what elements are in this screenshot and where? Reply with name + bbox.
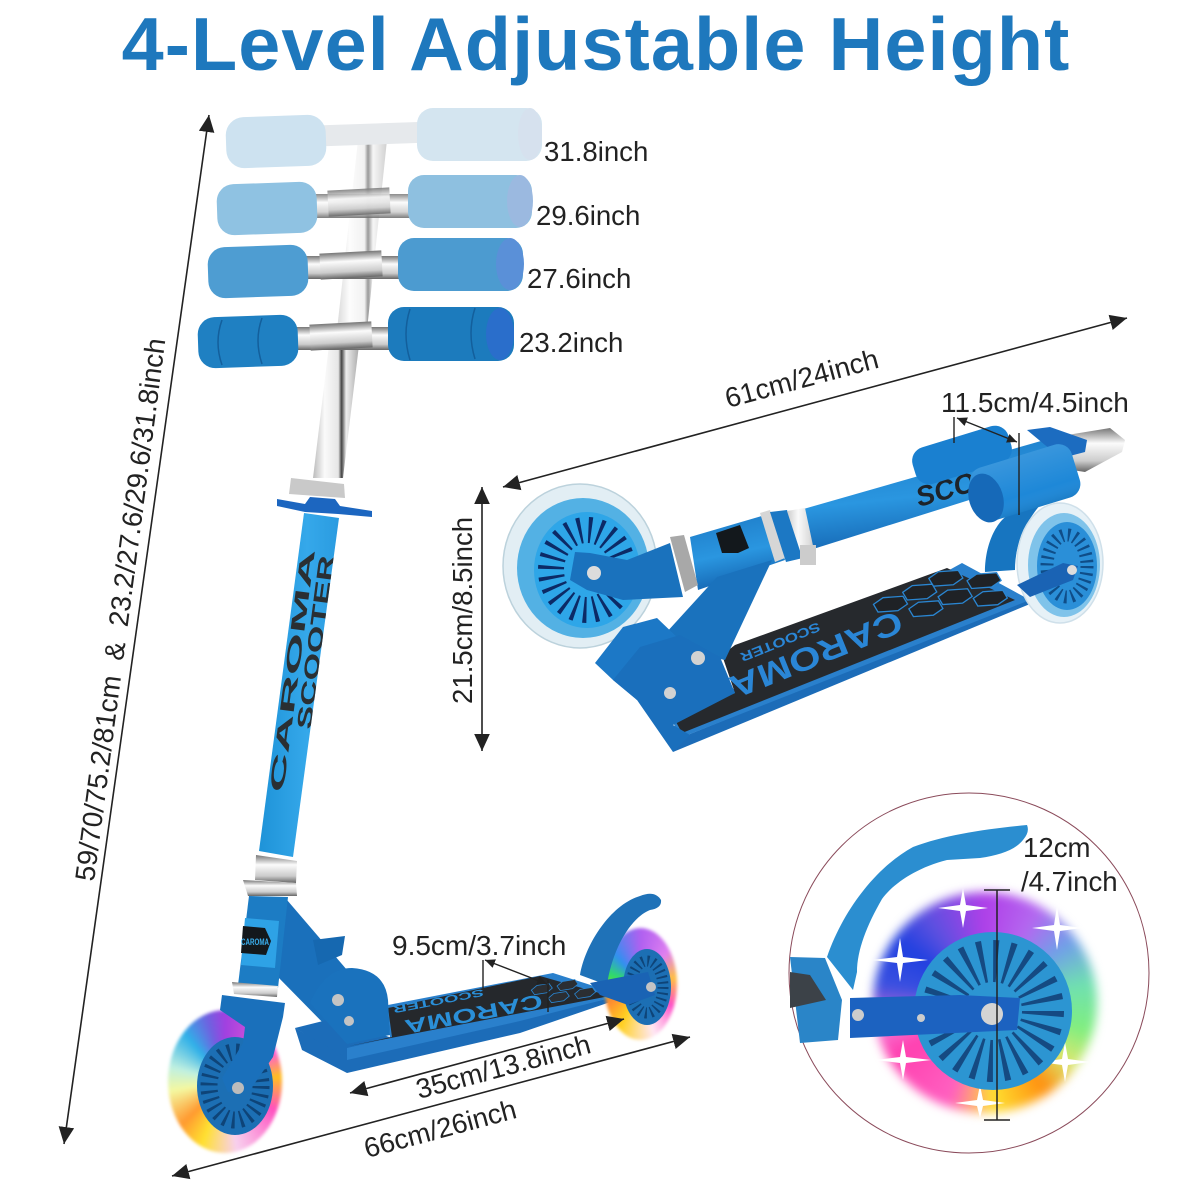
stem brand text: CAROMA [266, 548, 320, 794]
folded deck hex pattern [872, 567, 1008, 619]
folded deck top [673, 563, 1030, 738]
folded deck side [673, 597, 1030, 752]
lower stem band [241, 918, 279, 968]
dimension arrow: total height: 59/70/75.2/81cm & 23.2/27.6/29.6/31.8inch [69, 336, 171, 883]
deck side [295, 995, 622, 1073]
stem brand text: SCOOTER [293, 554, 339, 731]
deck hex pattern [531, 977, 596, 1005]
folded front grip [962, 441, 1084, 527]
dimension: deck width: 9.5cm/3.7inch [392, 930, 566, 961]
wheel diameter line [984, 889, 1010, 891]
wheel diameter label: 12cm [1023, 832, 1090, 863]
folded back grip [909, 422, 1015, 488]
dimension: deck length: 35cm/13.8inch [413, 1028, 594, 1105]
deck text: SCOOTER [391, 986, 485, 1015]
washer [232, 982, 278, 997]
folded rear fender [985, 505, 1040, 572]
lever [313, 936, 345, 965]
scooter: side view [158, 478, 687, 1163]
deck top [347, 973, 622, 1060]
folded rear wheel [1017, 503, 1103, 623]
stem logo tag: CAROMA [241, 937, 269, 947]
sparkles [872, 888, 1090, 1118]
height labels: 29.6inch [536, 200, 640, 231]
deck end [790, 957, 842, 1043]
dimension arrow: total height [64, 115, 209, 1144]
folded main plate [613, 635, 735, 752]
dimension: deck width [392, 930, 566, 1012]
handlebar: level 29.6 inch [216, 175, 533, 236]
main silver stem [313, 345, 359, 478]
dimension: folded height: 21.5cm/8.5inch [447, 517, 478, 704]
folded tube text: SCOOTER [912, 445, 1054, 513]
folded front wheel [503, 484, 657, 648]
bracket screws [852, 1009, 925, 1022]
handlebar: level 31.8 inch [225, 108, 542, 169]
pivot screws [332, 994, 354, 1026]
dimension: handlebar width [941, 387, 1129, 515]
dimension: folded length [503, 318, 1127, 487]
stem logo tag [241, 926, 271, 955]
detail circle: rear wheel [789, 793, 1149, 1153]
folded deck text [725, 604, 908, 705]
folded front axle [587, 566, 601, 580]
folding arm [276, 900, 347, 1030]
height labels: 27.6inch [527, 263, 631, 294]
rear bracket [590, 972, 655, 1005]
axle bolt [232, 1082, 244, 1094]
dimension: folded length: 61cm/24inch [722, 343, 882, 414]
upper translucent stem [337, 140, 387, 330]
stem brand text [271, 552, 334, 790]
folded deck text: SCOOTER [737, 619, 822, 665]
rear axle [646, 982, 656, 992]
height labels: 31.8inch [544, 136, 648, 167]
handlebar: level 23.2 inch [197, 307, 514, 369]
folded plate screws [664, 651, 705, 699]
folded deck text: CAROMA [725, 604, 908, 705]
rear fender [580, 894, 661, 985]
folded silver end [1055, 428, 1125, 472]
front wheel [158, 1000, 292, 1163]
pivot plate [310, 968, 390, 1044]
stem ring [243, 855, 297, 896]
bracket [850, 995, 1020, 1038]
fender [827, 825, 1028, 990]
light-up wheel [853, 872, 1117, 1133]
deck end grip [790, 972, 826, 1008]
folded rear bracket [1017, 563, 1078, 597]
main blue stem [259, 513, 339, 857]
dimension: deck length [350, 1019, 624, 1105]
rear wheel [594, 918, 687, 1050]
dimension: overall length [172, 1037, 690, 1176]
deck text [391, 986, 544, 1037]
deck front lip [295, 1018, 392, 1060]
height labels: 23.2inch [519, 327, 623, 358]
folded lower tube [690, 513, 785, 590]
folded main tube [800, 437, 1065, 550]
dimension: overall length: 66cm/26inch [361, 1093, 520, 1164]
folded clamp [760, 508, 816, 565]
folded blue clamp [1027, 427, 1087, 458]
lower stem [238, 896, 288, 988]
fork [220, 995, 285, 1092]
wheel hub [914, 932, 1072, 1090]
folded tube text [918, 474, 972, 506]
height labels [519, 136, 648, 358]
stem clamp [277, 478, 372, 517]
folded front fork [570, 543, 683, 600]
title: 4-Level Adjustable Height [122, 3, 1070, 87]
folded logo tag [716, 525, 749, 553]
dimension: handlebar width: 11.5cm/4.5inch [941, 387, 1129, 418]
handlebar: level 27.6 inch [207, 238, 524, 299]
axle [981, 1003, 1003, 1025]
folded back plate [595, 618, 680, 700]
scooter: folded view [503, 422, 1125, 752]
hub slots [943, 961, 1043, 1061]
detail circle: rear wheel: /4.7inch [1021, 866, 1118, 897]
folded ring [670, 535, 698, 592]
deck text: CAROMA [403, 989, 544, 1037]
folded arm [655, 560, 772, 660]
folded tube text: CAROMA [843, 428, 982, 497]
